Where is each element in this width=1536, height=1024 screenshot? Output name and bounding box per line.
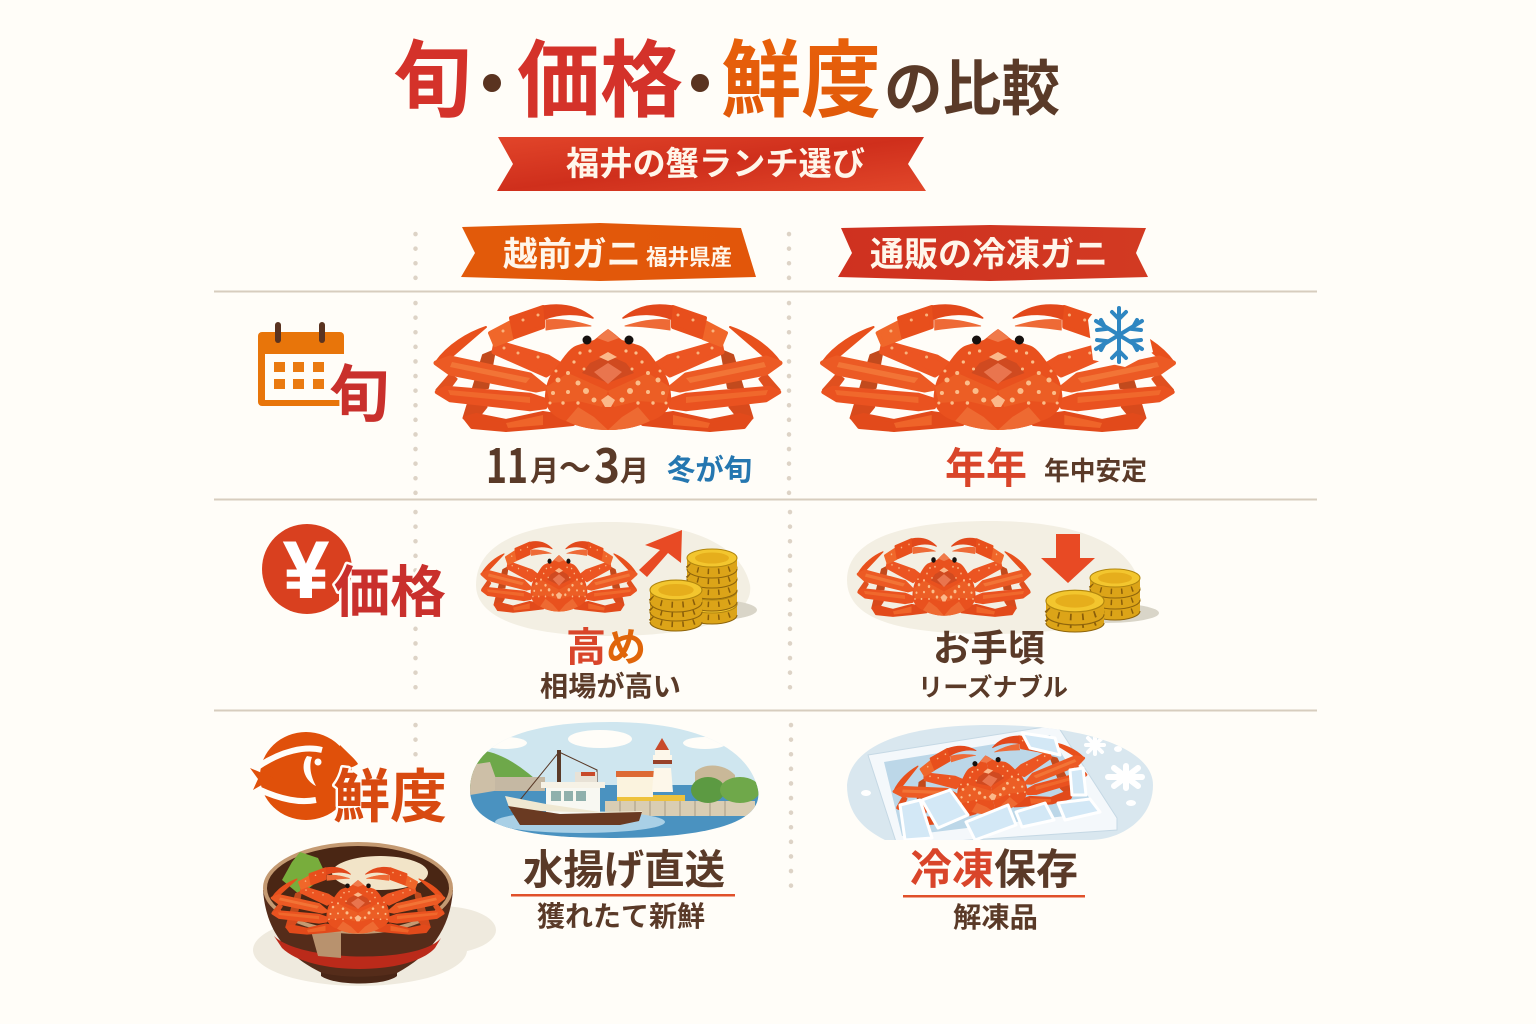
- frozen tray scene: [845, 723, 1155, 845]
- icon: snowflake: [1088, 306, 1153, 367]
- season text: echizen: 〜: [559, 443, 591, 489]
- coin stacks: [1046, 569, 1159, 632]
- coin stacks: [650, 549, 757, 631]
- price label: echizen: [540, 626, 681, 702]
- small crab: [482, 542, 636, 612]
- title: 旬: [393, 34, 471, 128]
- panel background: [847, 521, 1140, 634]
- infographic canvas: [214, 38, 1317, 986]
- column header: echizen crab: 越前ガニ: [503, 236, 641, 274]
- freshness label: frozen: 解凍品: [953, 902, 1038, 933]
- row icon: yen: [262, 524, 352, 614]
- row icon: calendar: [258, 322, 344, 406]
- season text: echizen: 冬が旬: [667, 453, 752, 487]
- snow decorations: [1086, 736, 1142, 788]
- price panel: echizen: [476, 522, 757, 636]
- row heading: freshness: 鮮度: [333, 765, 447, 830]
- price label: frozen: お手頃: [933, 628, 1045, 669]
- season text: echizen: 11: [486, 428, 528, 497]
- wharf wall: [605, 801, 755, 816]
- season text: echizen: 月: [620, 448, 649, 490]
- row icon: yen: ¥: [284, 525, 329, 614]
- boat: [495, 750, 665, 833]
- freshness label: echizen: [511, 847, 735, 932]
- column header: frozen mail-order crab: [838, 225, 1148, 281]
- subtitle ribbon: 福井の蟹ランチ選び: [566, 145, 865, 182]
- sky: [477, 722, 757, 785]
- clouds: [483, 730, 727, 749]
- row heading: season: 旬: [329, 361, 389, 430]
- row heading: price: 価格: [334, 561, 446, 624]
- freshness label: echizen: 水揚げ直送: [523, 847, 725, 893]
- up arrow: [639, 530, 682, 577]
- price label: frozen: [918, 628, 1068, 702]
- crab: frozen: [823, 305, 1173, 430]
- season text: frozen: 年年: [945, 445, 1027, 492]
- underline: [903, 895, 1085, 898]
- subtitle ribbon: [497, 137, 926, 191]
- season text: echizen: 3: [594, 428, 620, 497]
- hills: [470, 752, 533, 789]
- season text: frozen: 年中安定: [1044, 456, 1147, 486]
- harbour scene: [465, 720, 765, 841]
- down arrow: [1041, 534, 1095, 583]
- price label: frozen: リーズナブル: [918, 673, 1068, 702]
- ice cubes: [900, 733, 1100, 840]
- sea: [465, 785, 765, 841]
- panel background: [845, 723, 1155, 843]
- column header: frozen mail-order crab: 通販の冷凍ガニ: [870, 236, 1108, 274]
- season text: echizen: [486, 428, 752, 497]
- crab on ice: [892, 735, 1088, 825]
- row icon: fish: [250, 732, 358, 820]
- column header: echizen crab: [461, 223, 756, 281]
- crab: echizen: [436, 305, 780, 430]
- title: の比較: [884, 56, 1060, 123]
- panel background: [476, 522, 750, 636]
- title: [393, 34, 1060, 128]
- tray: [868, 725, 1117, 845]
- title: 価格: [517, 34, 683, 128]
- freshness label: frozen: [903, 846, 1085, 933]
- season text: echizen: 月: [530, 448, 559, 490]
- house and lighthouse: [616, 738, 685, 807]
- trees and rock: [695, 766, 735, 784]
- freshness label: frozen: 保存: [994, 846, 1078, 893]
- small crab: [858, 538, 1030, 616]
- freshness label: echizen: 獲れたて新鮮: [537, 901, 705, 932]
- price panel: frozen: [847, 521, 1159, 634]
- crab rice bowl: [253, 842, 496, 986]
- title: 鮮度: [721, 34, 881, 128]
- freshness label: frozen: 冷凍: [910, 846, 994, 893]
- season text: frozen: [945, 445, 1147, 492]
- price label: echizen: 相場が高い: [540, 670, 681, 702]
- underline: [511, 894, 735, 896]
- column header: echizen crab: 福井県産: [646, 245, 732, 270]
- price label: echizen: 高め: [566, 626, 646, 670]
